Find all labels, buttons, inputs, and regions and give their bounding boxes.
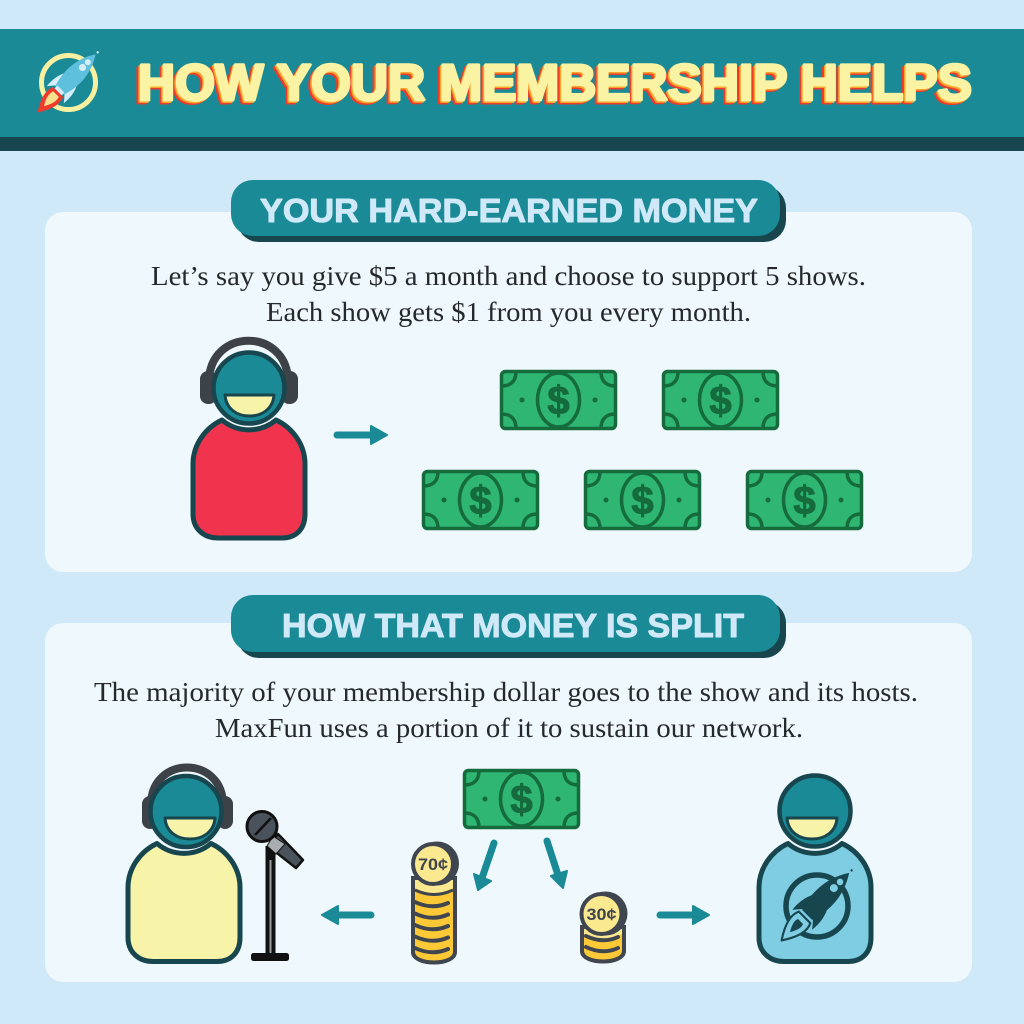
heading: how that money is split	[231, 595, 786, 658]
text: first explanation	[151, 261, 866, 327]
icon: rocket logo	[29, 43, 107, 121]
bill 2: $	[709, 379, 732, 423]
bill 2	[664, 372, 778, 428]
title: HOW YOUR MEMBERSHIP HELPS	[134, 57, 968, 114]
panel: how that money is split	[45, 623, 972, 982]
text: first explanation: Let’s say you give $5 a month and choose to support 5 shows.	[151, 261, 866, 291]
icon: rocket emblem on shirt	[771, 859, 863, 951]
bill: split dollar	[464, 770, 578, 828]
arrow: to host	[322, 906, 371, 924]
title: HOW YOUR MEMBERSHIP HELPS	[138, 54, 972, 111]
person: show host with headphones	[128, 768, 240, 962]
panel: your hard-earned money	[45, 212, 972, 572]
person: MaxFun with rocket shirt	[759, 776, 871, 962]
title: HOW YOUR MEMBERSHIP HELPS	[136, 56, 970, 112]
bill 4	[586, 472, 700, 528]
bill 5: $	[793, 479, 816, 523]
bill 1: $	[547, 379, 570, 423]
coin stack: 30 cents: 30¢	[586, 906, 616, 924]
person: member with headphones	[193, 341, 305, 538]
text: second explanation	[94, 677, 918, 743]
header banner	[0, 29, 1024, 151]
bill: split dollar: $	[510, 778, 533, 822]
heading: your hard-earned money	[231, 180, 786, 242]
arrow: member to money	[337, 426, 387, 444]
heading: how that money is split: HOW THAT MONEY IS SPLIT	[282, 607, 744, 644]
bill 5	[748, 472, 862, 528]
bill 3: $	[469, 479, 492, 523]
arrow: to MaxFun	[660, 906, 709, 924]
text: second explanation: The majority of your membership dollar goes to the show and its hosts.	[94, 677, 918, 707]
icon: microphone on stand	[247, 812, 303, 961]
bill 4: $	[631, 479, 654, 523]
heading: your hard-earned money: YOUR HARD-EARNED MONEY	[260, 192, 758, 229]
text: second explanation: MaxFun uses a portion of it to sustain our network.	[215, 713, 803, 743]
bill 3	[424, 472, 538, 528]
coin stack: 30 cents	[582, 892, 628, 962]
arrow: down to 30 cents	[547, 841, 567, 888]
coin stack: 70 cents	[413, 842, 459, 962]
bill 1	[502, 372, 616, 428]
arrow: down to 70 cents	[474, 843, 494, 890]
text: first explanation: Each show gets $1 from you every month.	[266, 297, 751, 327]
coin stack: 70 cents: 70¢	[418, 856, 448, 874]
